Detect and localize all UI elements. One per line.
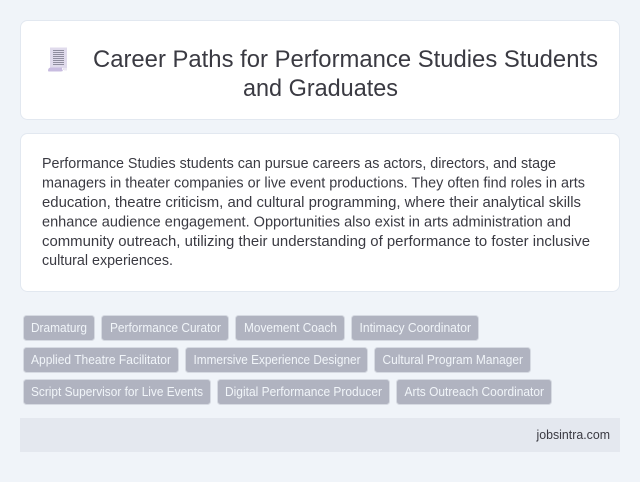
tag list [24,316,552,404]
description text [42,156,590,269]
tag: Performance Curator [102,316,228,340]
description text: cultural experiences. [42,253,173,269]
tag: Arts Outreach Coordinator [396,380,552,404]
title: and Graduates [243,75,398,102]
footer source text: jobsintra.com [536,428,610,442]
description text: education, theatre criticism, and cultural programming, where their analytical skills [42,195,581,211]
icon: scroll document [48,48,67,72]
footer bar [20,418,620,452]
tag: Dramaturg [24,316,94,340]
tag: Intimacy Coordinator: Intimacy Coordinator [360,321,471,335]
tag: Immersive Experience Designer [186,348,368,372]
tag: Digital Performance Producer [218,380,390,404]
tag: Movement Coach: Movement Coach [244,321,337,335]
description text: Performance Studies students can pursue careers as actors, directors, and stage [42,156,556,172]
tag: Script Supervisor for Live Events: Script Supervisor for Live Events [31,385,203,399]
panel: description card [20,134,620,292]
description text: community outreach, utilizing their understanding of performance to foster inclusive [42,234,590,250]
tag: Immersive Experience Designer: Immersive Experience Designer [194,353,360,367]
title: Career Paths for Performance Studies Students [93,46,598,73]
description text: enhance audience engagement. Opportunities also exist in arts administration and [42,214,571,230]
tag: Cultural Program Manager [374,348,530,372]
tag: Applied Theatre Facilitator [24,348,178,372]
tag: Intimacy Coordinator [352,316,478,340]
tag: Script Supervisor for Live Events [24,380,210,404]
tag: Arts Outreach Coordinator: Arts Outreach Coordinator [404,385,544,399]
panel: header card [20,20,620,120]
tag: Movement Coach [236,316,344,340]
description text: managers in theater companies or live event productions. They often find roles in arts [42,176,585,192]
tag: Performance Curator: Performance Curator [110,321,221,335]
tag: Applied Theatre Facilitator: Applied Theatre Facilitator [31,353,171,367]
title [93,46,598,102]
tag: Digital Performance Producer: Digital Performance Producer [225,385,382,399]
tag: Cultural Program Manager: Cultural Program Manager [382,353,523,367]
tag: Dramaturg: Dramaturg [31,321,87,335]
